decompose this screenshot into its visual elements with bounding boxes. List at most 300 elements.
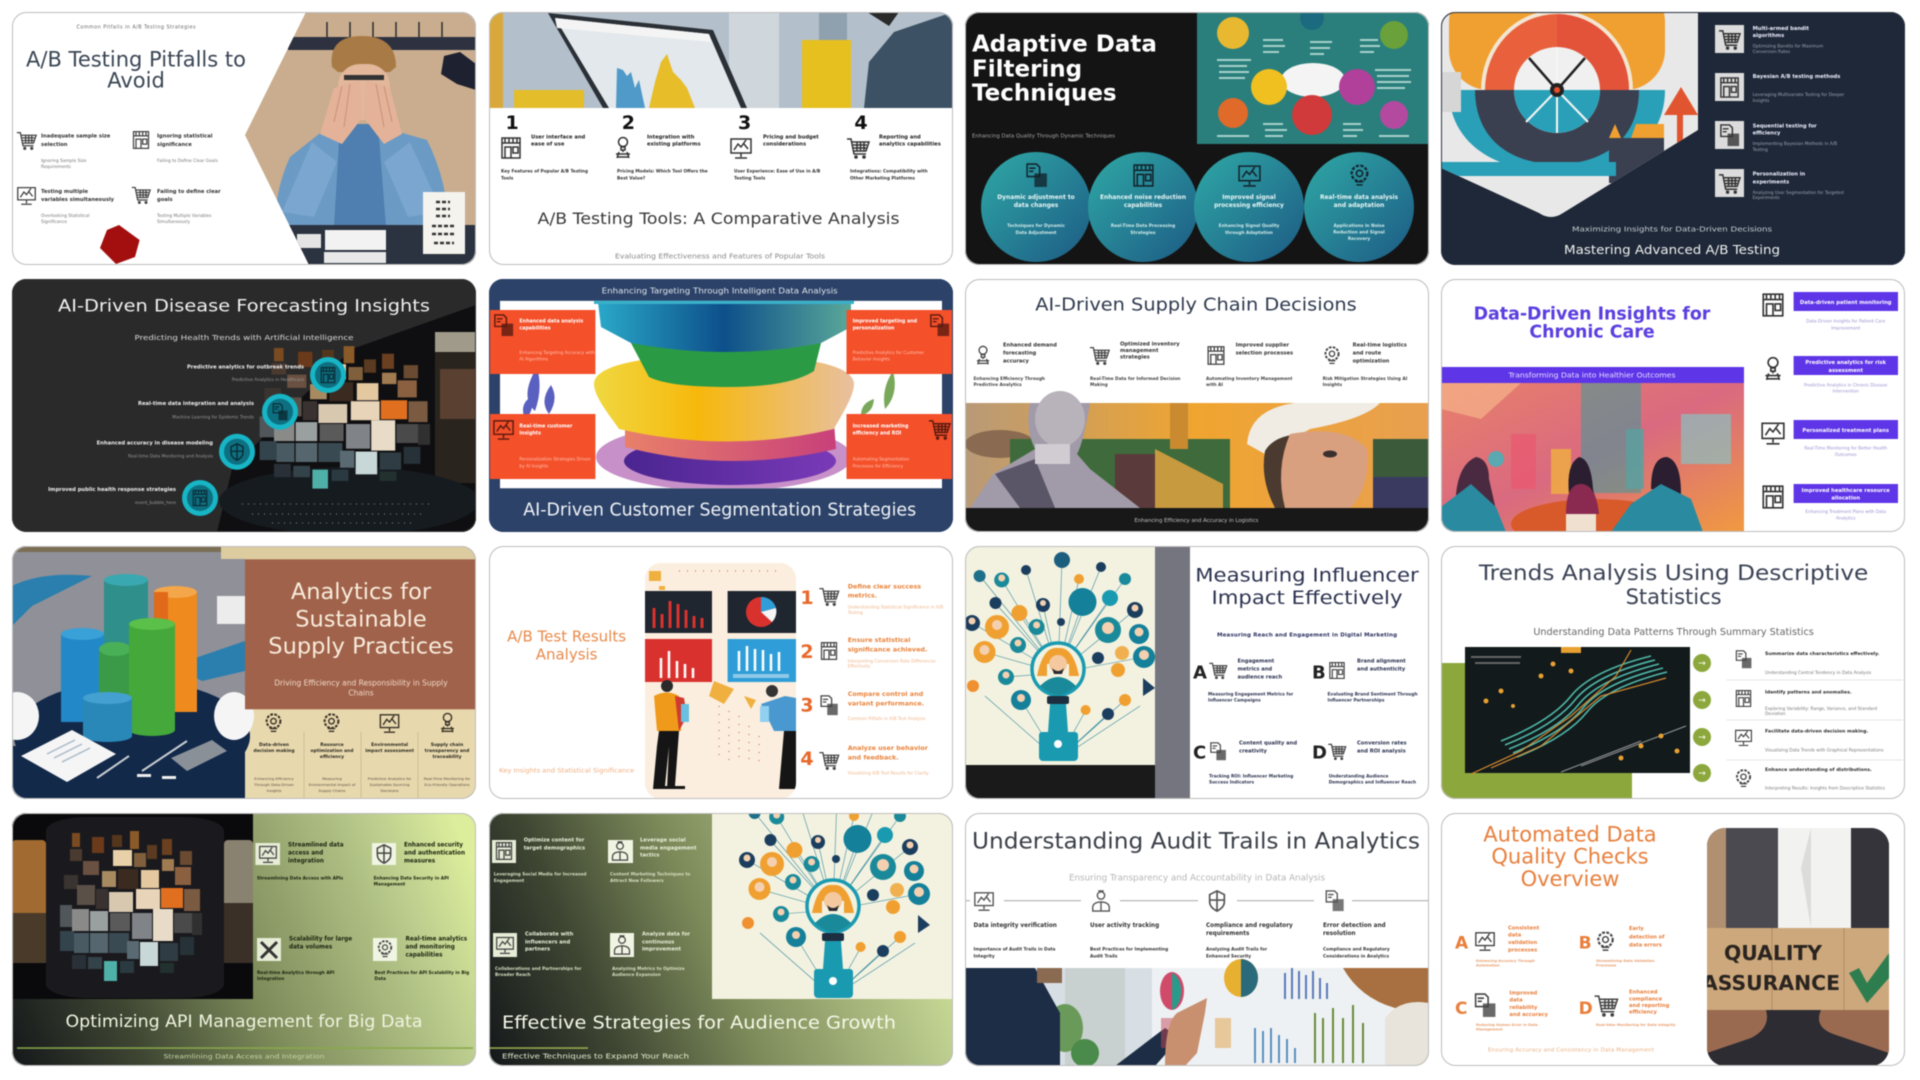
- panel: AI-Driven Supply Chain: [965, 279, 1429, 532]
- item D: compliance: [1629, 996, 1663, 1002]
- title: Adaptive Data: [972, 32, 1157, 58]
- item: patterns: Exploring Variability: Range, Variance, and Standard: [1765, 706, 1877, 712]
- item 3: 3: [800, 695, 814, 717]
- item 4: Analyze user behavior: [848, 744, 929, 752]
- item: patient monitoring: Data-driven patient monitoring: [1800, 300, 1892, 306]
- illustration: analysts and dashboards: [645, 563, 796, 799]
- item: data access: [255, 843, 344, 881]
- box: customer insights: [489, 414, 595, 479]
- item: treatment plans: Outcomes: [1835, 452, 1857, 458]
- item: scalability: Integration: [257, 976, 284, 982]
- column: decision making: Enhancing Efficiency: [254, 776, 294, 781]
- title: Chronic Care: [1529, 323, 1655, 343]
- box: targeting: Behavior Insights: [853, 357, 891, 363]
- item: scalability: Real-time Analytics through API: [257, 970, 335, 976]
- box: targeting: Predictive Analytics for Customer: [853, 350, 924, 356]
- item: sequential: Sequential testing for: [1753, 124, 1817, 130]
- illustration: data dome: [217, 305, 480, 535]
- item A: Consistent: [1508, 925, 1540, 931]
- title: Automated Data: [1483, 823, 1657, 847]
- item: errors: Considerations in Analytics: [1323, 954, 1389, 960]
- item C: creativity: [1239, 748, 1268, 754]
- box: marketing efficiency: efficiency and ROI: [853, 430, 902, 436]
- item D: and reporting: [1629, 1003, 1670, 1009]
- column: decision making: Insights: [267, 788, 281, 793]
- item: optimize content: Leveraging Social Media for Increased: [494, 872, 586, 878]
- circle: signal processing: Improved signal: [1222, 195, 1276, 201]
- item: multiple variables: [18, 188, 115, 225]
- item: patterns: →: [1698, 696, 1706, 706]
- box: customer insights: insights: [519, 430, 541, 436]
- item: Bayesian: Leveraging Multivariate Testing for Deeper: [1753, 92, 1845, 98]
- item A: Enhancing Accuracy Through: [1476, 959, 1535, 963]
- title: Understanding Audit Trails in Analytics: [972, 829, 1420, 854]
- panel: Adaptive Data Filtering: [965, 6, 1429, 265]
- item D: Real-time Monitoring for Data Integrity: [1596, 1023, 1676, 1027]
- item: sequential: efficiency: [1753, 130, 1781, 136]
- item 3: Compare control and: [848, 690, 924, 698]
- numbered item 2: 2: [622, 112, 635, 134]
- box: customer insights: Personalization Strategies Driven: [519, 457, 591, 463]
- column: environmental impact: [365, 715, 415, 793]
- title: Techniques: [972, 81, 1117, 107]
- subtitle: Effective Techniques to Expand Your Reach: [502, 1052, 689, 1060]
- circle: signal processing: processing efficiency: [1214, 203, 1284, 209]
- item: logistics: and route: [1353, 351, 1382, 357]
- box: targeting: personalization: [853, 325, 895, 331]
- photo: person covering eyes: [242, 12, 482, 267]
- item: sample size: Inadequate sample size: [41, 134, 111, 140]
- item A: Influencer Campaigns: [1208, 698, 1261, 704]
- item: inventory: Optimized inventory: [1120, 341, 1180, 347]
- item: security: [372, 843, 465, 887]
- item C: and accuracy: [1509, 1012, 1549, 1018]
- column: decision making: [253, 714, 295, 793]
- panel: Trends Analysis: [1441, 546, 1905, 799]
- title block: Supply Practices: [268, 633, 454, 659]
- item: data access: integration: [288, 859, 324, 865]
- item: optimize content: Optimize content for: [524, 838, 585, 844]
- item: public health: [48, 480, 218, 516]
- illustration: cylinders chart: [0, 546, 476, 799]
- item: clear goals: Simultaneously: [157, 219, 190, 225]
- title: Quality Checks: [1491, 845, 1649, 869]
- item D: [1312, 740, 1416, 786]
- item: logistics: Risk Mitigation Strategies Using AI: [1323, 376, 1408, 382]
- item: decision making: Facilitate data-driven decision making.: [1765, 728, 1868, 734]
- item C: [1455, 990, 1549, 1031]
- item: significance: [134, 132, 219, 164]
- column: resource optimization: Supply Chains: [319, 788, 345, 793]
- photo: team reviewing dashboards: [965, 959, 1429, 1067]
- subtitle: Ensuring Accuracy and Consistency in Data Management: [1488, 1048, 1655, 1054]
- panel: A/B Testing Pitfalls: [12, 12, 482, 267]
- subtitle: Maximizing Insights for Data-Driven Decisions: [1572, 225, 1772, 234]
- item D: Demographics and Influencer Reach: [1329, 780, 1416, 786]
- item B: detection of: [1629, 934, 1665, 940]
- item A: metrics and: [1238, 666, 1272, 672]
- item: summarize: Understanding Central Tendency in Data Analysis: [1765, 670, 1872, 676]
- item: clear goals: Testing Multiple Variables: [156, 213, 212, 219]
- item: errors: [1323, 891, 1390, 960]
- subtitle: Understanding Data Patterns Through Summary Statistics: [1533, 627, 1814, 638]
- column: transparency: Supply chain: [431, 742, 463, 748]
- circle: dynamic adjustment: data changes: [1014, 203, 1059, 209]
- circle: dynamic adjustment: Data Adjustment: [1016, 230, 1056, 236]
- subtitle band: Transforming Data into Healthier Outcomes: [1507, 372, 1676, 380]
- item: user activity: [1090, 891, 1168, 960]
- item A: A: [1455, 933, 1469, 953]
- item: security: Enhanced security: [404, 843, 463, 849]
- title: Effective Strategies for Audience Growth: [502, 1012, 896, 1033]
- box: customer insights: Real-time customer: [519, 423, 573, 429]
- panel: Analytics for Sustainable Supply: [0, 546, 476, 799]
- item: data integration: [138, 394, 298, 430]
- item: inventory: strategies: [1120, 355, 1150, 361]
- circle: noise reduction: [1088, 152, 1198, 262]
- item D: [1579, 990, 1676, 1027]
- item: decision making: →: [1698, 733, 1706, 743]
- item: logistics: [1323, 343, 1408, 388]
- item C: [1193, 740, 1297, 786]
- item A: A: [1193, 662, 1207, 683]
- item: optimize content: Engagement: [494, 878, 524, 884]
- item: sequential: Implementing Bayesian Methods in A/B: [1753, 141, 1837, 147]
- column: resource optimization: [309, 714, 356, 793]
- numbered item 1: ease of use: [531, 142, 565, 148]
- numbered item 4: Reporting and: [879, 134, 921, 140]
- numbered item 3: considerations: [763, 142, 806, 148]
- subtitle: Measuring Reach and Engagement in Digital Marketing: [1217, 633, 1397, 639]
- item B: and authenticity: [1357, 666, 1406, 672]
- panel: Optimizing API Management: [12, 813, 476, 1066]
- column: resource optimization: Resource: [320, 742, 344, 748]
- item D: Understanding Audience: [1329, 774, 1389, 780]
- box: data analysis: AI Algorithms: [519, 357, 549, 363]
- item: security: Management: [374, 881, 405, 887]
- numbered item 2: Pricing Models: Which Tool Offers the: [617, 169, 708, 175]
- title: A/B Testing Tools: A Comparative Analysis: [538, 209, 900, 228]
- item A: validation: [1508, 940, 1537, 946]
- numbered item 3: User Experience: Ease of Use in A/B: [734, 169, 820, 175]
- item: public health: event_bubble_here: [135, 500, 176, 506]
- numbered item 4: Other Marketing Platforms: [850, 175, 915, 181]
- item: outbreak trends: Predictive analytics for outbreak trends: [187, 364, 304, 370]
- circle: real-time analysis: [1304, 152, 1414, 262]
- item: patient monitoring: [1763, 292, 1898, 331]
- numbered item 4: 4: [854, 112, 868, 134]
- item: integrity: [974, 893, 1057, 960]
- item: integrity: Importance of Audit Trails in Data: [974, 947, 1056, 953]
- item: patient monitoring: Data-Driven Insights for Patient Care: [1806, 319, 1886, 325]
- item C: Reducing Human Error in Data: [1476, 1023, 1538, 1027]
- infographic thumbnail: [1197, 6, 1429, 144]
- item: treatment plans: Real-Time Monitoring for Better Health: [1804, 446, 1887, 452]
- box: data analysis: capabilities: [519, 325, 551, 331]
- box: marketing efficiency: Processes for Efficiency: [853, 463, 904, 469]
- circle: noise reduction: capabilities: [1124, 203, 1163, 209]
- item: user activity: Audit Trails: [1090, 954, 1118, 960]
- item 1: Understanding Statistical Significance in A/B: [848, 605, 943, 611]
- item C: Improved: [1509, 990, 1537, 996]
- item: collaborate: Collaborations and Partnerships for: [495, 966, 582, 972]
- column: environmental impact: Sustainable Sourcing: [370, 782, 410, 787]
- subtitle: Enhancing Targeting Through Intelligent Data Analysis: [602, 286, 838, 295]
- item: risk assessment: Predictive Analytics in Chronic Disease: [1804, 382, 1888, 388]
- image: circuit data streams: [1465, 647, 1690, 774]
- subtitle: Ensuring Transparency and Accountability in Data Analysis: [1069, 874, 1326, 884]
- item 1: [800, 582, 943, 616]
- item: analyze data: improvement: [642, 947, 682, 953]
- title: Measuring Influencer: [1195, 565, 1419, 587]
- item 2: Interpreting Conversion Rate Differences: [848, 658, 936, 664]
- item: bandit: algorithms: [1753, 33, 1784, 39]
- numbered item 1: [501, 112, 588, 181]
- numbered item 4: [847, 112, 941, 181]
- item: risk assessment: Predictive analytics for risk: [1805, 360, 1887, 366]
- item: collaborate: Collaborate with: [525, 932, 574, 938]
- numbered item 1: User interface and: [531, 134, 586, 140]
- title: Statistics: [1626, 585, 1722, 609]
- illustration: layered funnel: [500, 294, 942, 491]
- item: integrity: Data integrity verification: [974, 923, 1057, 929]
- decorative red hexagon: [100, 225, 140, 264]
- illustration: data cylinder: [12, 813, 253, 999]
- item: Bayesian: Insights: [1753, 98, 1770, 104]
- column: transparency: traceability: [432, 754, 462, 760]
- item: clear goals: [132, 188, 221, 225]
- item: accuracy: [97, 434, 255, 470]
- numbered item 2: existing platforms: [647, 142, 701, 148]
- item: decision making: [1693, 728, 1884, 754]
- photo: quality assurance blocks: [1702, 828, 1889, 1066]
- numbered item 3: 3: [738, 112, 751, 134]
- item: collaborate: influencers and: [525, 939, 570, 945]
- item 3: variant performance.: [848, 699, 924, 707]
- item C: data: [1509, 998, 1523, 1004]
- subtitle: Evaluating Effectiveness and Features of Popular Tools: [615, 252, 826, 260]
- item: compliance: [1206, 891, 1293, 960]
- item: data integration: Machine Learning for Epidemic Trends: [172, 414, 255, 420]
- item 4: [800, 744, 929, 776]
- item: supplier: Automating Inventory Management: [1206, 376, 1292, 382]
- title block: Sustainable: [295, 607, 427, 633]
- numbered item 4: Integrations: Compatibility with: [850, 169, 928, 175]
- title: Optimizing API Management for Big Data: [66, 1012, 422, 1032]
- item: errors: resolution: [1323, 931, 1356, 937]
- item: patterns: [1693, 690, 1877, 717]
- circle: noise reduction: Real-Time Data Processing: [1111, 223, 1175, 229]
- title: Mastering Advanced A/B Testing: [1564, 242, 1780, 257]
- item B: B: [1579, 933, 1592, 953]
- item: compliance: Enhanced Security: [1206, 954, 1251, 960]
- item C: C: [1455, 999, 1467, 1019]
- subtitle: Predicting Health Trends with Artificial Intelligence: [134, 333, 354, 342]
- item 1: metrics.: [848, 591, 877, 599]
- item: data integration: Real-time data integration and analysis: [138, 401, 254, 407]
- item: data access: access and: [288, 851, 323, 857]
- photo: quality assurance blocks: ASSURANCE: [1702, 971, 1840, 995]
- item: analyze data: continuous: [642, 939, 674, 945]
- box: targeting: [846, 310, 953, 374]
- item: multiple variables: variables simultaneously: [41, 197, 115, 203]
- item D: Enhanced: [1629, 990, 1658, 996]
- panel: Understanding Audit Trails: [965, 813, 1429, 1067]
- item A: audience reach: [1238, 674, 1282, 680]
- box: marketing efficiency: Automating Segmentation: [853, 457, 910, 463]
- column: environmental impact: Environmental: [371, 742, 409, 748]
- circle: signal processing: through Adaptation: [1225, 230, 1273, 236]
- item: compliance: requirements: [1206, 931, 1250, 937]
- item: analyze data: Analyze data for: [642, 932, 691, 938]
- item: multiple variables: Overlooking Statistical: [41, 213, 90, 219]
- item: supplier: [1206, 343, 1293, 388]
- item: user activity: Best Practices for Implementing: [1090, 947, 1168, 953]
- item B: data errors: [1629, 943, 1662, 949]
- item: summarize: [1693, 651, 1880, 676]
- subtitle band: [1441, 367, 1744, 383]
- item 4: and feedback.: [848, 753, 899, 761]
- item: demand forecasting: [974, 343, 1057, 388]
- footer band: [965, 508, 1429, 532]
- item C: Tracking ROI: Influencer Marketing: [1209, 774, 1293, 780]
- title block: Analytics for: [291, 579, 432, 605]
- item 1: Define clear success: [848, 582, 921, 590]
- item: resource allocation: allocation: [1831, 495, 1860, 501]
- item: data access: Streamlined data: [288, 843, 344, 849]
- item A: Measuring Engagement Metrics for: [1208, 692, 1294, 698]
- item: bandit: Optimizing Bandits for Maximum: [1753, 44, 1823, 50]
- item: distributions: Enhance understanding of distributions.: [1765, 767, 1872, 773]
- item: collaborate: [493, 932, 582, 978]
- item: logistics: optimization: [1353, 359, 1390, 365]
- item: sample size: selection: [41, 142, 68, 148]
- item: distributions: Interpreting Results: Insights from Descriptive Statistics: [1765, 786, 1886, 792]
- item: security: and authentication: [404, 851, 465, 857]
- box: marketing efficiency: [846, 414, 953, 479]
- item: summarize: Summarize data characteristics effectively.: [1765, 651, 1880, 657]
- column: transparency: transparency and: [425, 748, 469, 754]
- title: A/B Testing Pitfalls to: [26, 48, 246, 72]
- item: optimize content: [492, 838, 586, 884]
- item: security: measures: [404, 859, 436, 865]
- circle: noise reduction: Strategies: [1130, 230, 1156, 236]
- item 4: Visualizing A/B Test Results for Clarity: [848, 770, 929, 776]
- panel: A/B Testing Tools: [489, 12, 953, 265]
- title: AI-Driven Supply Chain Decisions: [1035, 295, 1357, 316]
- item: analyze data: [610, 932, 691, 978]
- item: analyze data: Audience Expansion: [612, 972, 661, 978]
- item: sequential: [1715, 121, 1837, 153]
- numbered item 2: [616, 112, 708, 181]
- item: distributions: [1693, 764, 1886, 792]
- item D: efficiency: [1629, 1010, 1657, 1016]
- item: personalization: Analyzing User Segmentation for Targeted: [1753, 190, 1844, 196]
- item: resource allocation: Analytics: [1836, 516, 1856, 522]
- item: optimize content: target demographics: [524, 845, 585, 851]
- item: supplier: with AI: [1206, 382, 1223, 388]
- item: monitoring: [373, 937, 469, 982]
- item: scalability: [257, 937, 352, 982]
- numbered item 3: Testing Tools: [734, 175, 766, 181]
- panel: Effective Strategies for Audience Growth: [489, 789, 953, 1066]
- item C: C: [1193, 743, 1206, 764]
- photo: tablet with charts: [489, 12, 953, 108]
- item: patterns: Identify patterns and anomalies.: [1765, 690, 1852, 696]
- title: AI-Driven Customer Segmentation Strategies: [523, 500, 916, 521]
- column: transparency: [424, 713, 471, 787]
- item B: Influencer Partnerships: [1328, 698, 1385, 704]
- item C: reliability: [1509, 1005, 1538, 1011]
- item: significance: significance: [157, 142, 192, 148]
- item: sequential: Testing: [1752, 147, 1768, 153]
- item: demand forecasting: Enhancing Efficiency Through: [974, 376, 1045, 382]
- item: accuracy: Enhanced accuracy in disease modeling: [97, 441, 213, 447]
- column: decision making: Through Data-Driven: [253, 782, 295, 787]
- item: personalization: [1715, 169, 1844, 201]
- illustration: target gauge: [1441, 0, 1701, 222]
- panel: Mastering Advanced A/B Testing: [1441, 0, 1905, 265]
- item: inventory: management: [1120, 348, 1159, 354]
- item: demand forecasting: forecasting: [1003, 351, 1037, 357]
- item: demand forecasting: Enhanced demand: [1003, 343, 1057, 349]
- circle: dynamic adjustment: Techniques for Dynamic: [1007, 223, 1065, 229]
- subtitle: Enhancing Data Quality Through Dynamic Techniques: [972, 134, 1115, 140]
- title: AI-Driven Disease Forecasting Insights: [58, 297, 430, 317]
- item: accuracy: Real-time Data Monitoring and Analysis: [128, 454, 214, 460]
- item: personalization: Personalization in: [1753, 172, 1805, 178]
- item D: and ROI analysis: [1357, 748, 1406, 754]
- item D: D: [1312, 743, 1327, 764]
- column: environmental impact: Decisions: [381, 788, 399, 793]
- item 2: Ensure statistical: [848, 636, 910, 644]
- item B: Processes: [1596, 964, 1616, 968]
- column: environmental impact: Predictive Analytics for: [368, 776, 412, 781]
- item: Bayesian: [1715, 73, 1845, 104]
- item B: Evaluating Brand Sentiment Through: [1328, 692, 1418, 698]
- item: collaborate: partners: [525, 947, 550, 953]
- item: supplier: selection processes: [1236, 351, 1293, 357]
- item: scalability: data volumes: [289, 945, 333, 951]
- panel: AI-Driven Customer Segmentation: [489, 279, 953, 532]
- item: resource allocation: Improved healthcare resource: [1802, 488, 1890, 494]
- item: errors: Compliance and Regulatory: [1323, 947, 1390, 953]
- item: significance: Ignoring statistical: [157, 134, 213, 140]
- title: Overview: [1521, 867, 1619, 891]
- item: errors: Error detection and: [1323, 923, 1386, 929]
- item: social media: Attract New Followers: [610, 878, 664, 884]
- item A: [1455, 925, 1540, 968]
- item: sample size: Requirements: [41, 164, 72, 170]
- column: transparency: Eco-Friendly Operations: [424, 782, 470, 787]
- item: inventory: Real-Time Data for Informed Decision: [1090, 376, 1180, 382]
- item: personalization: Experiments: [1753, 195, 1780, 201]
- item B: B: [1312, 662, 1326, 683]
- item: scalability: Scalability for large: [289, 937, 352, 943]
- item: supplier: Improved supplier: [1236, 343, 1289, 349]
- item 2: Effectively: [848, 664, 871, 670]
- item: sample size: [17, 133, 111, 170]
- circle: real-time analysis: Recovery: [1348, 236, 1370, 242]
- item: risk assessment: Intervention: [1833, 389, 1859, 395]
- item: distributions: →: [1698, 769, 1706, 779]
- item: monitoring: and monitoring: [406, 945, 455, 951]
- numbered item 2: Integration with: [647, 134, 695, 140]
- column: resource optimization: efficiency: [320, 754, 344, 760]
- panel: Data-Driven Insights for Chronic Care: [1441, 279, 1905, 549]
- item: resource allocation: [1763, 484, 1898, 522]
- item 2: [800, 636, 936, 670]
